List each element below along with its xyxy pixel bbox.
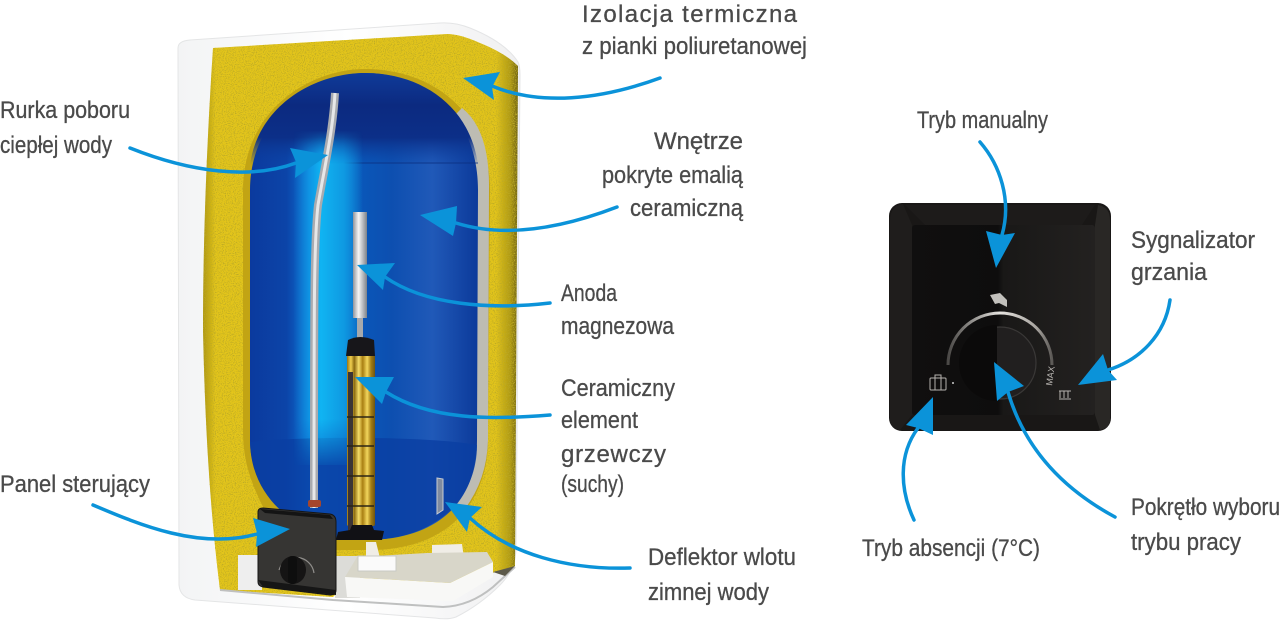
tank lining: [243, 69, 490, 550]
element base: [336, 525, 384, 540]
panel outer frame: [889, 203, 1111, 431]
panel inner face: [912, 225, 1095, 415]
label: absence mode: Tryb absencji (7°C): [862, 535, 1040, 562]
label: heating element: [561, 375, 675, 498]
tank grey inner wall: [440, 108, 489, 510]
manual mode tap icon: [990, 293, 1007, 307]
small connector: [358, 556, 396, 571]
label: enamel interior: Wnętrze: [654, 128, 743, 155]
heating indicator icon: [1059, 391, 1071, 399]
arrow: enamel interior: [420, 206, 617, 236]
heater white casing: [178, 23, 520, 619]
left white base block: [238, 555, 262, 590]
anode stem: [357, 318, 363, 338]
label: heating indicator: [1131, 227, 1255, 286]
label: deflector: Deflektor wlotu: [648, 544, 796, 571]
arrow: anode: [357, 263, 550, 306]
MAX label: MAX: [1044, 366, 1057, 386]
frame left highlight: [890, 204, 912, 430]
label: insulation: Izolacja termiczna: [582, 1, 798, 28]
label: insulation: z pianki poliuretanowej: [582, 33, 807, 60]
arrow: insulation: [463, 72, 660, 100]
element gold body: [347, 354, 375, 526]
arrow: deflector: [445, 502, 630, 568]
panel bottom edge: [258, 580, 336, 595]
label: insulation: [582, 1, 807, 60]
label: enamel interior: ceramiczną: [630, 195, 744, 222]
temperature arc: [948, 313, 1052, 365]
polyurethane foam insulation: [203, 34, 518, 597]
label: heating element: element: [561, 407, 638, 434]
arrow: heating element: [355, 377, 550, 418]
label: mode knob: trybu pracy: [1131, 529, 1241, 556]
frame right highlight: [1095, 205, 1110, 430]
label: deflector: zimnej wody: [648, 579, 769, 606]
bottom plastic housing top: [345, 552, 493, 583]
knob dark half: [959, 325, 997, 401]
magnesium anode: [353, 212, 367, 318]
label: deflector: [648, 544, 796, 606]
arrow: hot water pipe: [130, 148, 328, 178]
water heater cutaway: [178, 23, 520, 619]
hot water pipe: [314, 93, 335, 508]
enamelled tank interior: [250, 73, 478, 540]
panel top shadow: [260, 509, 333, 519]
panel body: [258, 508, 336, 595]
housing fitting posts: [366, 542, 464, 558]
arrow: mode knob: [994, 362, 1115, 517]
housing mid block: [335, 556, 360, 598]
tank seam line: [320, 162, 478, 164]
label: heating indicator: grzania: [1131, 259, 1208, 286]
pipe red fitting: [308, 500, 321, 507]
bottom plastic housing front: [345, 562, 493, 601]
panel knob handle: [288, 556, 297, 584]
label: manual mode: Tryb manualny: [917, 107, 1048, 134]
label: anode: Anoda: [561, 280, 618, 307]
label: anode: [561, 280, 675, 340]
element black cap: [346, 337, 375, 356]
knob: [964, 327, 1036, 399]
casing inner bottom rim: [220, 567, 515, 607]
label: heating element: grzewczy: [561, 441, 666, 468]
ceramic heating element: [336, 337, 384, 540]
label: enamel interior: pokryte emalią: [602, 162, 744, 189]
element rings: [347, 417, 374, 506]
arrow: absence mode: [903, 397, 933, 520]
control panel box: [258, 508, 336, 595]
label: mode knob: [1131, 494, 1280, 556]
label: control panel: Panel sterujący: [0, 471, 150, 498]
tank lower shading: [250, 438, 477, 540]
panel knob: [280, 556, 306, 584]
label: hot water pipe: ciepłej wody: [0, 132, 112, 159]
cold water inlet deflector: [437, 478, 443, 514]
light glow around pipe: [293, 130, 363, 465]
label: hot water pipe: [0, 97, 130, 159]
arrow: manual mode: [980, 142, 1015, 268]
absence dot: [952, 382, 954, 384]
label: hot water pipe: Rurka poboru: [0, 97, 130, 124]
label: enamel interior: [602, 128, 744, 222]
label: heating element: (suchy): [561, 471, 624, 498]
arrow: control panel: [93, 505, 290, 547]
dark gap under housing: [493, 566, 515, 576]
label: anode: magnezowa: [561, 313, 675, 340]
label: heating indicator: Sygnalizator: [1131, 227, 1255, 254]
panel dial arc: [279, 557, 314, 573]
arrow: heating indicator: [1078, 300, 1170, 385]
element side rod: [348, 372, 353, 532]
tank upper dome shadow: [250, 73, 478, 165]
absence mode suitcase icon: [930, 375, 946, 390]
control panel close-up: [889, 203, 1111, 431]
frame top bevel: [905, 205, 1095, 225]
label: heating element: Ceramiczny: [561, 375, 675, 402]
